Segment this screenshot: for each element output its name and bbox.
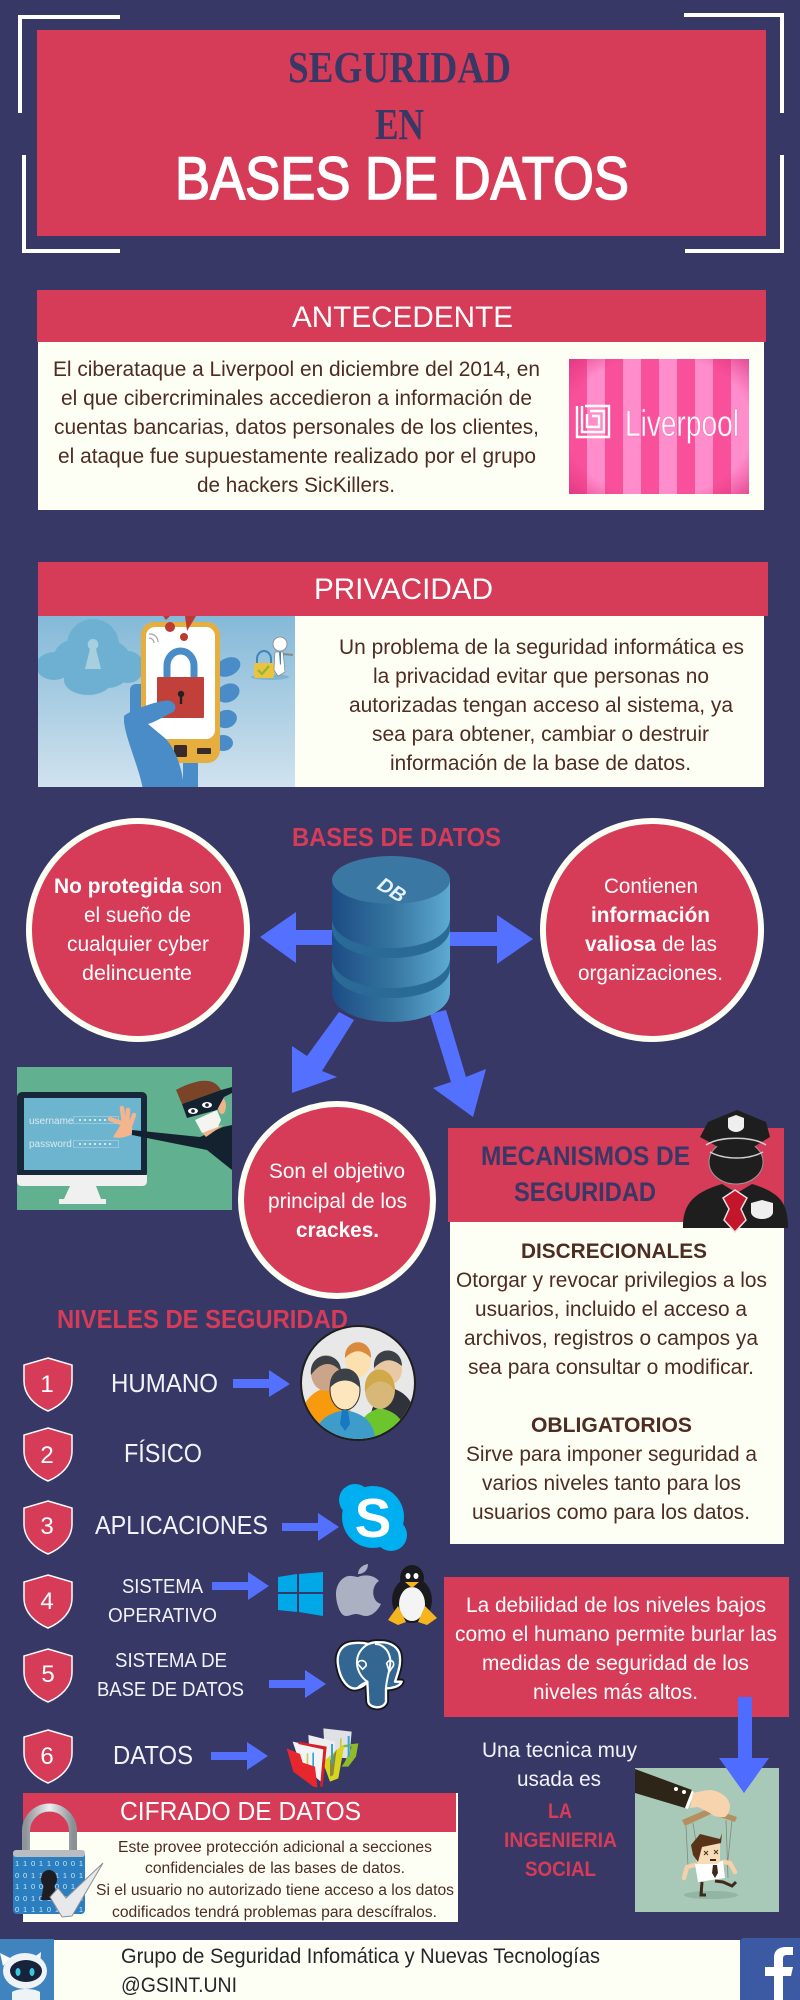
footer [0,1938,800,2000]
icon: policeman [683,1110,788,1232]
footer text: Grupo de Seguridad Infomática y Nuevas Tecnologías [121,1945,600,1968]
icon: database cylinder [332,856,450,1022]
circle: no protegida: delincuente [82,962,192,985]
icon: facebook [740,1938,800,2000]
level 2: fisico [24,1428,202,1481]
icon: database cylinder: DB [373,874,410,908]
text block: antecedente: cuentas bancarias, datos personales de los clientes, [54,416,539,439]
circle: no protegida: No protegida [54,875,183,898]
level 5: sistema de base de datos [24,1649,326,1702]
icon: apple [336,1564,381,1616]
icon: postgresql elephant [338,1642,402,1707]
text block: cifrado: codificados tendrá problemas para descífralos. [112,1904,437,1921]
text block: cifrado: Este provee protección adicional a secciones [118,1839,432,1856]
text block: privacidad: información de la base de datos. [390,752,691,775]
image: phone lock [36,616,295,790]
text block: obligatorios: OBLIGATORIOS [531,1414,692,1437]
icon: shield 3: 3 [40,1513,54,1540]
icon: linux penguin [388,1565,437,1625]
icon: lock with checkmark: 0 0 1 0 1 1 0 1 0 [15,1894,83,1903]
icon: shield 1 [24,1358,72,1411]
panel: debilidad [444,1577,789,1717]
image: liverpool logo: Liverpool [625,403,739,444]
text block: obligatorios [466,1414,757,1524]
text block: antecedente: El ciberataque a Liverpool en diciembre del 2014, en [53,358,540,381]
heading: mecanismos: MECANISMOS DE [481,1141,690,1171]
heading: cifrado: CIFRADO DE DATOS [120,1796,361,1826]
icon: lock with checkmark: 0 0 1 1 0 1 1 0 1 [15,1871,83,1880]
circle: informacion valiosa: información [591,904,710,927]
text block: privacidad [339,636,744,775]
level 1: humano [24,1358,290,1411]
icon: shield 2 [24,1428,72,1481]
heading: antecedente: ANTECEDENTE [292,301,513,334]
icon: shield 4 [24,1575,72,1628]
circle: informacion valiosa: Contienen [604,875,698,898]
circle: crackers: principal de los [268,1190,407,1213]
icon: shield 2: 2 [40,1442,54,1469]
text block: antecedente: de hackers SicKillers. [197,474,395,497]
icon: robot [0,1939,54,2000]
text block: discrecionales: Otorgar y revocar privilegios a los [456,1269,767,1292]
panel: debilidad: medidas de seguridad de los [482,1652,749,1675]
text block: antecedente: el ataque fue supuestamente realizado por el grupo [58,445,536,468]
text block: cifrado: confidenciales de las bases de datos. [145,1860,405,1877]
level 2: fisico: FÍSICO [124,1438,202,1468]
text block: obligatorios: Sirve para imponer seguridad a [466,1443,757,1466]
image: hacker at computer [17,1067,232,1210]
heading: mecanismos [481,1141,690,1207]
text block: ingenieria social [482,1739,637,1881]
panel: mecanismos de seguridad [448,1110,788,1544]
circle: crackers: crackes. [296,1219,379,1242]
level 3: aplicaciones [24,1501,339,1554]
level 5: sistema de base de datos: BASE DE DATOS [97,1679,244,1701]
panel: debilidad: como el humano permite burlar las [455,1623,777,1646]
image: liverpool logo [569,359,749,494]
icon: shield 3 [24,1501,72,1554]
heading: niveles de seguridad: NIVELES DE SEGURIDAD [57,1304,348,1334]
level 3: aplicaciones: APLICACIONES [95,1510,268,1540]
text block: discrecionales [456,1240,767,1379]
level 4: sistema operativo: OPERATIVO [108,1605,217,1627]
text block: ingenieria social: LA [548,1800,572,1823]
title panel [37,30,766,236]
title line: bases de datos: BASES DE DATOS [175,145,629,212]
title line: en: EN [375,100,424,149]
title frame brackets [18,13,784,253]
circle: informacion valiosa: organizaciones. [578,962,723,985]
level 6: datos [24,1730,268,1783]
icon: group of people [300,1325,416,1441]
text block: ingenieria social: INGENIERIA [504,1829,617,1852]
level 6: datos: DATOS [113,1740,193,1770]
circle: informacion valiosa: de las [662,933,717,956]
icon: shield 1: 1 [40,1371,54,1398]
text block: privacidad: Un problema de la seguridad informática es [339,636,744,659]
text block: ingenieria social: Una tecnica muy [482,1739,637,1762]
arrow: down to puppet [719,1697,769,1793]
icon: skype: S [355,1487,391,1549]
icon: lock with checkmark: 1 1 0 0 1 0 0 1 1 [15,1882,83,1891]
image: puppet [635,1768,779,1912]
icon: shield 4: 4 [40,1588,54,1615]
level 4: sistema operativo [24,1572,269,1628]
icon: windows [278,1572,323,1616]
icon: shield 6 [24,1730,72,1783]
text block: cifrado: Si el usuario no autorizado tiene acceso a los datos [96,1882,454,1899]
icon: shield 5: 5 [41,1661,55,1688]
image: hacker at computer: username [29,1116,74,1127]
text block: privacidad: sea para obtener, cambiar o destruir [372,723,709,746]
text block: obligatorios: usuarios como para los datos. [472,1501,750,1524]
title line: seguridad: SEGURIDAD [288,43,511,92]
circle: crackers: Son el objetivo [269,1160,405,1183]
text block: ingenieria social: usada es [517,1768,601,1791]
circle: no protegida: son [189,875,222,898]
icon: data folders [287,1728,358,1787]
level 4: sistema operativo: SISTEMA [122,1576,204,1598]
arrow: right [450,915,533,964]
image: hacker at computer: password [29,1139,72,1150]
panel: debilidad: La debilidad de los niveles bajos [466,1594,766,1617]
panel: cifrado de datos [13,1793,458,1922]
text block: discrecionales: DISCRECIONALES [521,1240,707,1263]
panel: debilidad: niveles más altos. [533,1681,698,1704]
heading: privacidad: PRIVACIDAD [314,573,493,606]
footer: @GSINT.UNI [121,1974,237,1997]
text block: cifrado [96,1839,454,1921]
arrow: left [260,912,332,963]
text block: ingenieria social: SOCIAL [525,1858,596,1881]
icon: shield 6: 6 [40,1743,54,1770]
arrow: down right [430,1010,486,1117]
icon: lock with checkmark [13,1808,103,1917]
panel: antecedente [37,290,766,510]
icon: lock with checkmark: 0 1 1 1 0 1 0 0 1 [15,1905,83,1914]
icon: lock with checkmark: 1 1 0 1 1 0 0 0 1 [15,1859,83,1868]
level 1: humano: HUMANO [111,1368,218,1398]
arrow: down left [292,1012,354,1093]
heading: mecanismos: SEGURIDAD [514,1177,656,1207]
icon: skype [339,1484,407,1551]
level 5: sistema de base de datos: SISTEMA DE [115,1650,227,1672]
circle: crackers [241,1104,433,1296]
text block: antecedente: el que cibercriminales accedieron a información de [61,387,532,410]
heading: bases de datos: BASES DE DATOS [292,822,501,852]
icon: shield 5 [24,1649,72,1702]
text block: privacidad: la privacidad evitar que personas no [373,665,709,688]
circle: informacion valiosa [543,821,761,1039]
text block: discrecionales: archivos, registros o campos ya [464,1327,758,1350]
text block: obligatorios: varios niveles tanto para los [482,1472,741,1495]
text block: discrecionales: usuarios, incluido el acceso a [475,1298,747,1321]
circle: informacion valiosa: valiosa [585,933,656,956]
circle: no protegida: el sueño de [84,904,191,927]
text block: antecedente [53,358,540,497]
text block: privacidad: autorizadas tengan acceso al sistema, ya [349,694,733,717]
text block: discrecionales: sea para consultar o modificar. [468,1356,754,1379]
circle: no protegida [29,821,247,1039]
panel: privacidad [36,562,768,790]
circle: no protegida: cualquier cyber [67,933,209,956]
